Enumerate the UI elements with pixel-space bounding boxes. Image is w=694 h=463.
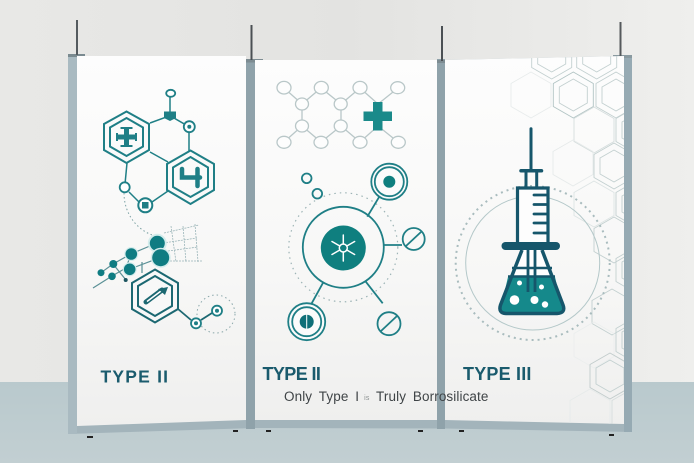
molecule network with plus bbox=[277, 81, 405, 148]
background hexagon pattern bbox=[510, 56, 624, 424]
caption text: Only Type I bbox=[284, 389, 359, 404]
floor bbox=[0, 382, 694, 463]
ring nodes with dotted circle bbox=[178, 295, 235, 333]
network grid bbox=[163, 224, 203, 262]
central hub diagram bbox=[288, 164, 425, 340]
icon: syringe and flask bbox=[499, 129, 564, 314]
heading: type II left: TYPE II bbox=[100, 366, 169, 386]
molecule cluster bbox=[93, 234, 171, 288]
panel: middle bbox=[255, 60, 437, 420]
molecule with two hexagons bbox=[104, 90, 214, 237]
caption text: is bbox=[359, 395, 370, 402]
panel: left bbox=[77, 56, 246, 426]
caption text: Truly Borrosilicate bbox=[369, 389, 488, 404]
hexagon with pencil icon bbox=[132, 270, 178, 322]
icon: filled nodes and cross bbox=[116, 112, 191, 208]
thin circle bbox=[466, 196, 600, 330]
panel: display frame bbox=[68, 20, 632, 438]
heading: type III: TYPE III bbox=[463, 364, 532, 384]
dotted circle bbox=[456, 186, 610, 340]
icon: plus bbox=[364, 102, 392, 130]
panel: right bbox=[445, 56, 624, 424]
icon: number 4 glyph bbox=[182, 169, 200, 186]
heading: type II middle: TYPE II bbox=[262, 364, 320, 384]
